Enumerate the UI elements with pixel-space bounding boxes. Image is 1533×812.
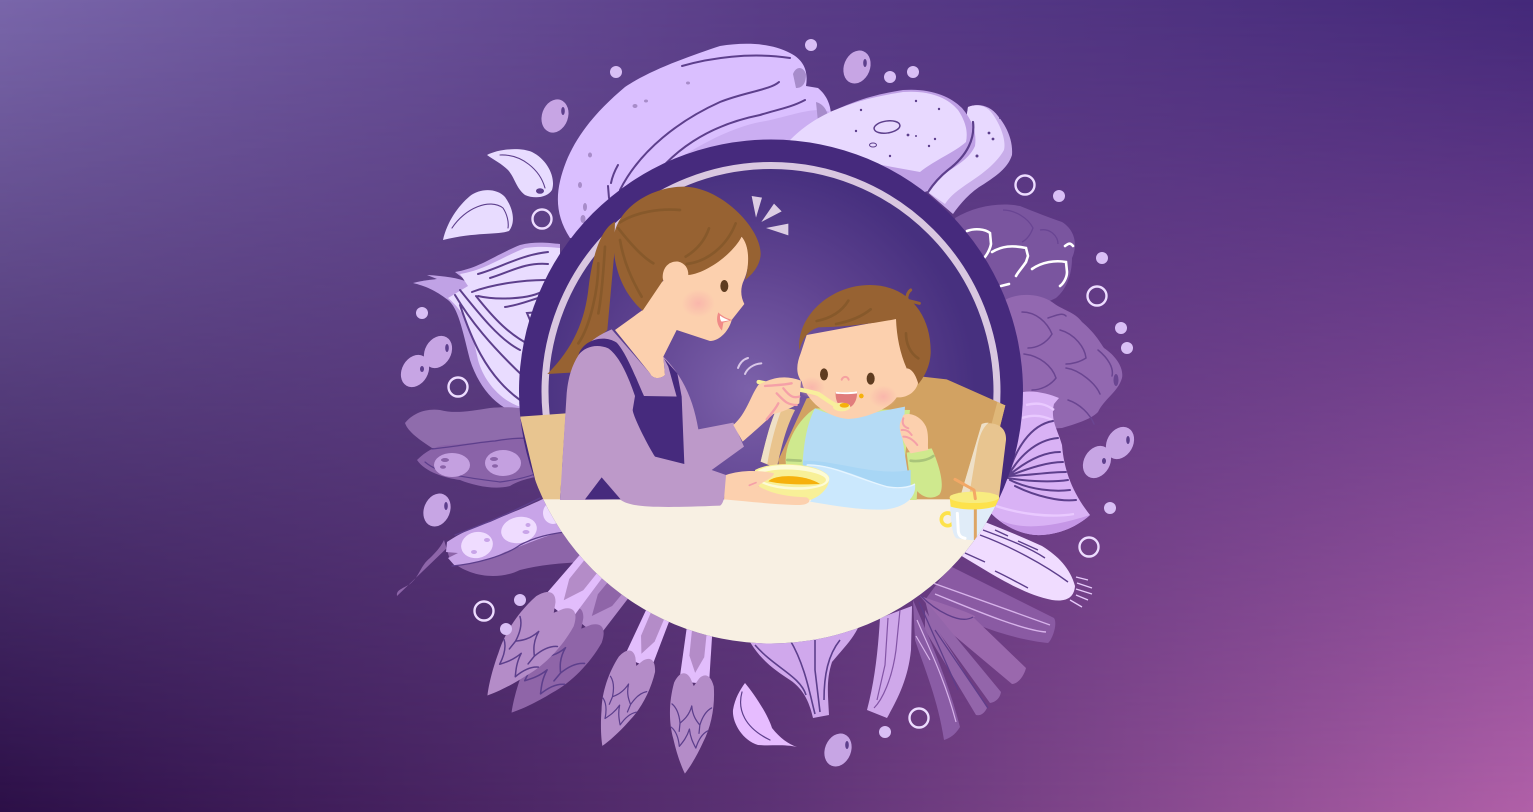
squash, top — [558, 44, 831, 240]
body and sleeves — [786, 408, 910, 466]
motion lines — [738, 358, 761, 374]
rings — [448, 176, 1106, 728]
mother top — [560, 329, 744, 507]
artichoke, dark upper — [955, 204, 1075, 320]
bib — [802, 406, 908, 472]
mother mouth — [717, 312, 733, 331]
high chair — [761, 376, 1006, 500]
scene clipped to circle — [520, 186, 1006, 644]
central circle badge — [519, 140, 1023, 644]
garlic clove, left — [443, 190, 513, 240]
baby eyes — [820, 368, 828, 380]
dots — [416, 39, 1133, 738]
spoon — [759, 382, 845, 408]
vegetable wreath — [395, 39, 1140, 776]
purple stalks — [867, 566, 1055, 740]
baby hair — [799, 285, 931, 384]
asparagus spears — [467, 531, 722, 776]
mother ear — [662, 262, 688, 281]
mother — [547, 187, 809, 507]
long root vegetable — [955, 522, 1092, 607]
artichoke, light lower — [990, 295, 1122, 430]
head hair — [613, 187, 761, 311]
baby — [759, 285, 942, 510]
onion, right — [985, 391, 1090, 535]
apron — [578, 339, 684, 464]
garlic clove, bottom — [733, 683, 797, 747]
cup — [941, 479, 999, 543]
left chair part — [520, 413, 566, 500]
table — [543, 499, 999, 644]
baby head — [797, 318, 918, 419]
beans — [395, 46, 1140, 771]
baby hand — [900, 414, 928, 453]
onion bottom segment — [750, 628, 858, 718]
sparkle marks — [752, 196, 788, 235]
neck and face — [615, 237, 748, 378]
onion, left — [413, 243, 560, 420]
mother hand under bowl — [724, 471, 809, 505]
bread slices — [790, 90, 1012, 214]
bean pod, lower — [397, 498, 585, 596]
garlic clove, top — [487, 149, 553, 197]
lower cloth — [803, 465, 915, 510]
mother eye — [720, 280, 728, 292]
mother hand with spoon — [733, 377, 801, 442]
baby mouth — [836, 391, 857, 409]
ponytail — [547, 222, 615, 374]
bean pod, upper — [405, 407, 545, 488]
bowl — [754, 463, 830, 501]
